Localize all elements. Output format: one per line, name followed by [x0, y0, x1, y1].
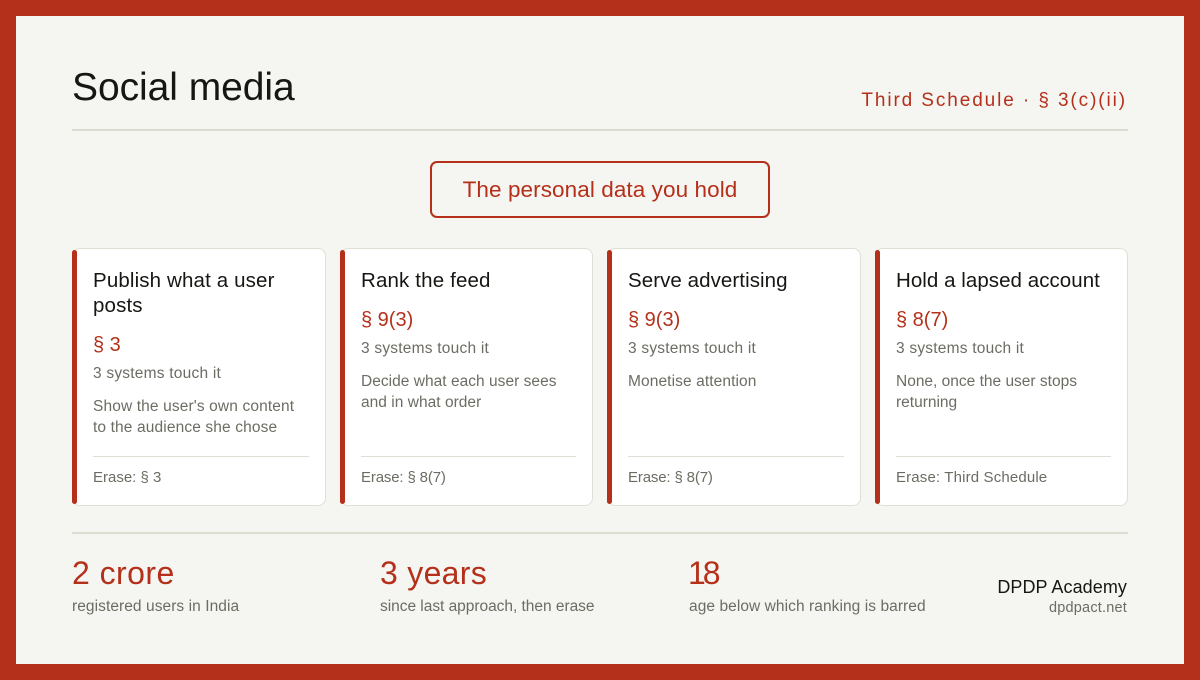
systems count: 3 systems touch it [628, 340, 756, 357]
purpose: to the audience she chose [93, 419, 277, 436]
stat label: since last approach, then erase [380, 598, 594, 615]
card: publish what a user posts [72, 248, 326, 506]
erase rule: Erase: Third Schedule [896, 469, 1047, 486]
purpose: Show the user's own content [93, 398, 294, 415]
section reference: § 8(7) [896, 309, 948, 331]
stat: years since last approach [380, 555, 594, 615]
card heading: Publish what a user [93, 269, 275, 292]
accent bar [72, 250, 77, 504]
accent bar [875, 250, 880, 504]
stat value: 2 crore [72, 555, 175, 591]
stat value: 18 [688, 555, 718, 591]
purpose [361, 373, 556, 411]
stat label: age below which ranking is barred [689, 598, 926, 615]
erase rule: Erase: § 8(7) [361, 469, 446, 486]
purpose: and in what order [361, 394, 481, 411]
accent bar [607, 250, 612, 504]
stat label: registered users in India [72, 598, 239, 615]
systems count: 3 systems touch it [896, 340, 1024, 357]
erase rule: Erase: § 8(7) [628, 469, 713, 486]
erase rule: Erase: § 3 [93, 469, 161, 486]
schedule reference: Third Schedule · § 3(c)(ii) [861, 90, 1127, 111]
stat: age threshold [688, 555, 926, 615]
stat value: 3 years [380, 555, 487, 591]
card heading: Serve advertising [628, 269, 788, 292]
purpose [896, 373, 1077, 411]
accent bar [340, 250, 345, 504]
purpose: returning [896, 394, 957, 411]
section reference: § 9(3) [628, 309, 680, 331]
brand url: dpdpact.net [1049, 600, 1127, 616]
purpose: None, once the user stops [896, 373, 1077, 390]
central node: the personal data you hold [430, 161, 770, 218]
systems count: 3 systems touch it [361, 340, 489, 357]
card heading: Hold a lapsed account [896, 269, 1100, 292]
section reference: § 3 [93, 334, 121, 356]
brand block [997, 577, 1127, 616]
purpose [93, 398, 294, 436]
purpose: Monetise attention [628, 373, 756, 390]
card heading: Rank the feed [361, 269, 491, 292]
section reference: § 9(3) [361, 309, 413, 331]
systems count: 3 systems touch it [93, 365, 221, 382]
card heading [93, 269, 275, 317]
card: rank the feed [340, 248, 593, 506]
title: Social media [72, 66, 295, 109]
stat: registered users [72, 555, 240, 615]
card: serve advertising [607, 248, 861, 506]
purpose: Decide what each user sees [361, 373, 556, 390]
central node: the personal data you hold: The personal data you hold [463, 177, 737, 202]
card: hold a lapsed account [875, 248, 1128, 506]
brand name: DPDP Academy [997, 577, 1127, 597]
card heading: posts [93, 294, 143, 317]
